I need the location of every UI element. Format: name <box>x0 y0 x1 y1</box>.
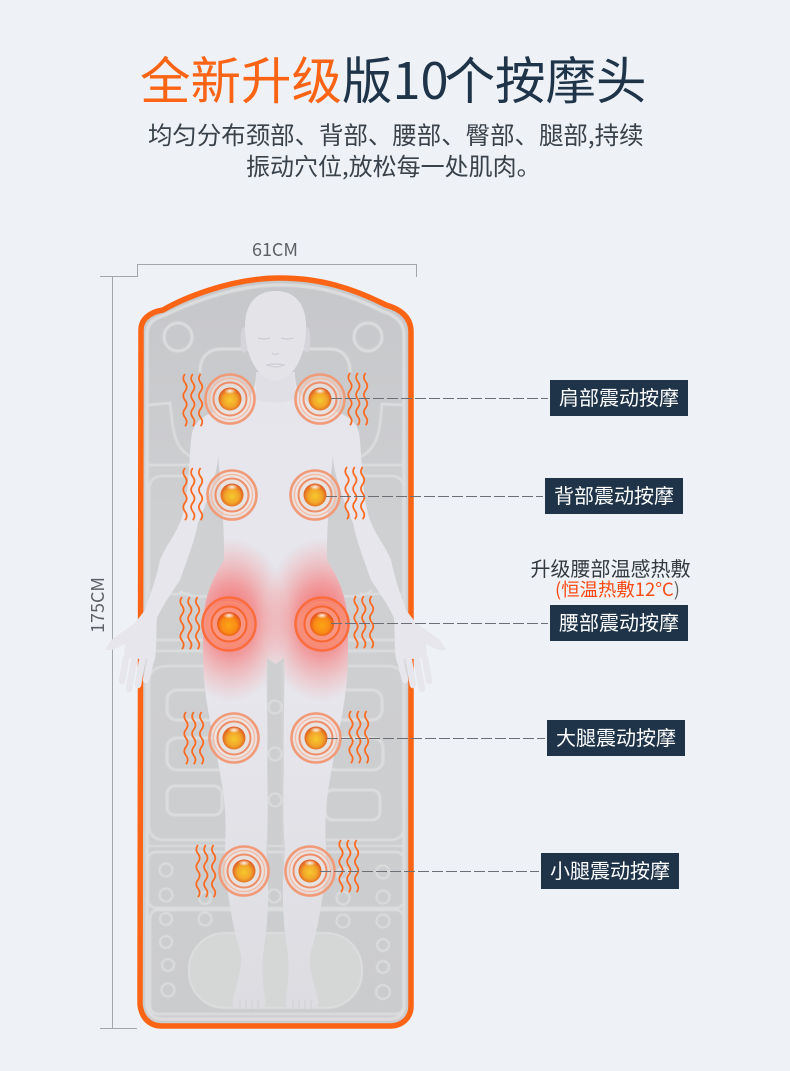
embossed mat pattern <box>147 285 404 1019</box>
body left half <box>105 372 276 1009</box>
label: back: 背部震动按摩 <box>554 480 674 509</box>
body right half <box>276 372 446 1009</box>
subtitle: 均匀分布颈部、背部、腰部、臀部、腿部,持续 <box>148 117 644 152</box>
title: 全新升级版10个按摩头 <box>140 40 647 114</box>
label: calf: 小腿震动按摩 <box>550 855 670 884</box>
massage mat <box>140 278 411 1026</box>
leader lines <box>320 398 548 872</box>
dimension: height 175CM: 175CM <box>84 577 110 633</box>
dimension: height 175CM <box>84 276 137 1028</box>
waist heat glow <box>203 544 348 696</box>
toes <box>240 1000 311 1009</box>
subtitle: 振动穴位,放松每一处肌肉。 <box>246 147 541 182</box>
note: waist heating: (恒温热敷12°C) <box>555 576 680 602</box>
ears <box>240 327 248 353</box>
massage heads <box>202 374 348 896</box>
dimension: width 61CM <box>138 236 416 277</box>
note: waist heating: 升级腰部温感热敷 <box>530 553 690 582</box>
vibration waves <box>180 373 373 897</box>
label: shoulder: 肩部震动按摩 <box>559 382 679 411</box>
head <box>245 291 306 381</box>
dimension: width 61CM: 61CM <box>252 236 298 262</box>
mat base with orange border <box>140 278 411 1026</box>
note: waist heating <box>530 553 690 602</box>
fingers <box>122 656 429 689</box>
label: waist: 腰部震动按摩 <box>559 607 679 636</box>
label: thigh: 大腿震动按摩 <box>556 722 676 751</box>
facial features <box>258 338 293 367</box>
neck shadow <box>254 372 297 402</box>
human body figure <box>105 291 446 1009</box>
subtitle <box>148 117 644 182</box>
